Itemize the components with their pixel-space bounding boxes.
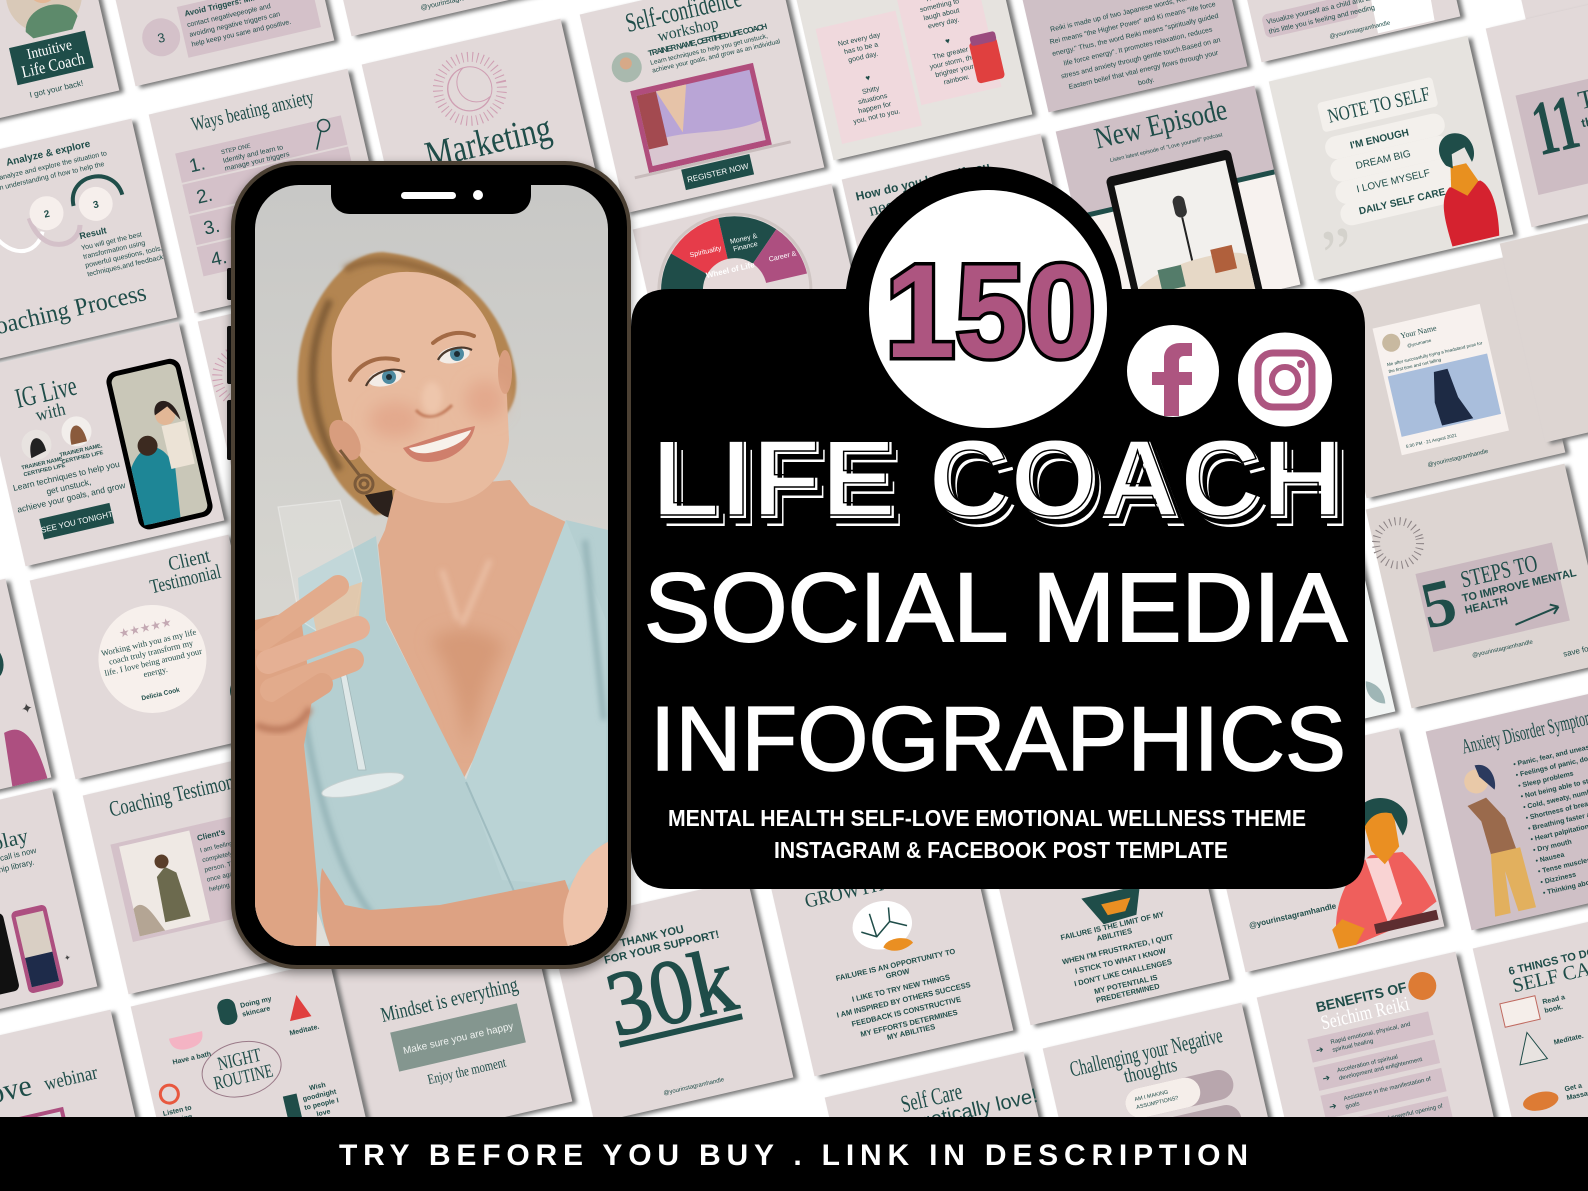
tile: affirmation note cards: happen for: [858, 101, 893, 115]
tile: five steps: @yourinstagramhandle: [1472, 639, 1534, 659]
tile: client testimonial: Client: [166, 545, 212, 576]
tile: benefits of seichim reiki: goals: [1345, 1101, 1360, 1110]
tile: client testimonial: Testimonial: [148, 561, 223, 598]
tile: self-confidence workshop: Learn techniques to help you get unstuck,: [650, 33, 769, 67]
tile: five steps: [1366, 463, 1588, 708]
badge: 150: [869, 190, 1107, 428]
tile: anxiety disorder symptoms: • Nausea: [1535, 852, 1565, 865]
heading: life coach: LIFE COACH: [653, 419, 1345, 542]
tile: note to self: I'M ENOUGH: [1349, 127, 1410, 152]
tile: benefits of seichim reiki: BENEFITS OF: [1314, 979, 1409, 1015]
tile: night routine: ROUTINE: [212, 1061, 275, 1094]
tile: affirmation note cards: good day.: [848, 51, 879, 64]
icon: instagram: [1238, 332, 1332, 426]
tile: ig live: IG Live: [12, 371, 80, 415]
tile: anxiety disorder symptoms: • Dizziness: [1540, 871, 1577, 886]
tile: affirmation note cards: brighter your: [935, 63, 975, 79]
tile: reiki description: life force energy". It promotes relaxation, reduces: [1063, 26, 1214, 68]
tile: benefits of seichim reiki: ➔: [1335, 1129, 1345, 1140]
tile: note to self: ”: [1315, 213, 1363, 295]
tile: wheel of life: Money &: [729, 233, 758, 246]
tile: your name post: the first time and not falling: [1388, 357, 1442, 374]
tile: avoid triggers: help keep you sane and positive.: [191, 19, 292, 49]
tile: growth mindset: GROW: [885, 966, 911, 981]
tile: reiki description: [1003, 0, 1247, 112]
tile: how do you know: [842, 134, 1086, 378]
tile: benefits of seichim reiki: spiritual healing: [1332, 1039, 1374, 1054]
tile: coaching process: transformation using: [83, 240, 146, 261]
tile: visualize yourself: [1216, 0, 1460, 62]
tile: right edge: [1500, 198, 1588, 442]
photo: smiling woman holding a champagne glass: [255, 185, 608, 946]
tile: benefits of seichim reiki: ➔: [1322, 1072, 1332, 1084]
tile: marketing: [362, 19, 606, 263]
tile: new episode: New Episode: [1091, 93, 1230, 156]
mouth: [403, 426, 475, 462]
tile: night routine: [131, 961, 372, 1189]
tile: handle strip: [306, 0, 550, 36]
tile: ways beating anxiety: 2.: [194, 185, 215, 209]
tile: benefits of seichim reiki: the heart for love: [1351, 1122, 1397, 1139]
tile: client testimonial: [30, 535, 274, 779]
tile: benefits of seichim reiki: ➔: [1315, 1044, 1325, 1055]
tile: coaching testimonials: Coaching Testimonials: [107, 763, 258, 822]
tile: your name post: Me after successfully trying a headstand pose for: [1386, 340, 1483, 367]
tile: affirmation note cards: The greater: [932, 46, 970, 61]
subtitle line 1: MENTAL HEALTH SELF-LOVE EMOTIONAL WELLNESS THEME: [668, 805, 1306, 831]
tile: ig live: with: [34, 399, 67, 425]
tile: benefits of seichim reiki: Acceleration of spiritual: [1337, 1054, 1398, 1074]
tile: affirmation note cards: rainbow.: [943, 74, 970, 86]
black title panel: [631, 167, 1365, 889]
tile: ways beating anxiety: manage your triggers: [224, 151, 291, 173]
tile: self care: unapologetically love!: [848, 1085, 1040, 1149]
tile: client testimonial: life. I love being around your: [103, 646, 203, 678]
tile: client testimonial: coach truly transform my: [108, 637, 195, 667]
tile: ig live: SEE YOU TONIGHT: [40, 509, 114, 535]
tile: ig live: TRAINER NAME,: [21, 456, 65, 472]
tile: visualize yourself: @yourinstagramhandle: [1329, 20, 1392, 40]
tile: your name post: @yourname: [1407, 338, 1432, 348]
tile: challenging negative thoughts: ASSUMPTIONS?: [1136, 1095, 1179, 1111]
tile: failure limiting mindset: WHEN I'M FRUSTRATED, I QUIT: [1061, 932, 1175, 966]
tile: ways beating anxiety: 1.: [187, 153, 207, 177]
right hand: [563, 842, 608, 946]
tile: growth mindset: I LIKE TO TRY NEW THINGS: [851, 972, 951, 1004]
tile: replay: ✦: [63, 953, 72, 963]
tile: ways beating anxiety: 4.: [209, 247, 229, 271]
tile: avoid triggers: contact negativepeople and: [186, 3, 272, 29]
tile: failure limiting mindset: ABILITIES: [1096, 926, 1133, 943]
tile: person writing: [1200, 728, 1444, 972]
tile: night routine: Listen to: [162, 1105, 192, 1118]
tile: six things to do: [1473, 903, 1588, 1147]
phone camera: [473, 190, 483, 200]
tile: top right corner: [1489, 0, 1588, 57]
tile: growth mindset: [769, 832, 1013, 1076]
tile: reiki description: Rei means "the Higher Power" and Ki means "life force: [1049, 1, 1217, 46]
tile: avoid triggers: avoiding negative triggers can: [189, 11, 281, 39]
eyes: [368, 370, 402, 387]
tile: coaching process: Result: [78, 225, 108, 241]
tile: ways beating anxiety: STEP ONE: [221, 144, 251, 156]
tile: your name post: @yourinstagramhandle: [1427, 449, 1490, 469]
tile: night routine: affirmations: [161, 1121, 202, 1137]
tile: replay: [0, 788, 97, 1032]
tile: self-confidence workshop: workshop: [656, 15, 720, 45]
tile: challenging negative thoughts: thoughts: [1122, 1054, 1179, 1088]
tile: eleven tips: [1486, 0, 1588, 227]
tile: five steps: 5: [1415, 565, 1463, 643]
tile: client testimonial: Working with you as my life: [100, 627, 197, 658]
tile: client testimonial: energy.: [142, 664, 168, 679]
tile: failure limiting mindset: I STICK TO WHAT I KNOW: [1074, 946, 1168, 976]
tile: self care: Self Care: [898, 1079, 965, 1118]
tile: ig live: Learn techniques to help you: [12, 459, 121, 493]
tile: coaching process: [0, 118, 178, 363]
icon: facebook: [1127, 325, 1219, 417]
tile: ways beating anxiety: [149, 69, 393, 313]
tile: failure limiting mindset: MY POTENTIAL IS: [1093, 973, 1158, 996]
tile: thank you 30k: FOR YOUR SUPPORT!: [603, 929, 720, 967]
panel background with circular tab: [631, 167, 1365, 889]
hair: [298, 252, 516, 515]
tile: ig live: [0, 322, 224, 566]
tile: benefits of seichim reiki: ➔: [1328, 1100, 1338, 1112]
tile: mindset is everything: Enjoy the moment: [426, 1056, 508, 1088]
tile: avoid triggers: 3: [156, 30, 167, 46]
badge: 150: 150: [885, 238, 1096, 386]
tile: affirmation note cards: has to be a: [844, 41, 879, 56]
dress: [298, 520, 608, 946]
tile: marketing: Marketing: [421, 107, 555, 177]
tile: coaching process: analyze and explore the situation to: [0, 150, 108, 182]
tile: coaching testimonials: I am feeling: [199, 840, 234, 854]
tile: moon behind phone: [198, 276, 442, 520]
tile: five steps: HEALTH: [1464, 595, 1509, 617]
tile: coaching process: Analyze & explore: [5, 139, 92, 169]
tile: night routine: calming: [166, 1114, 193, 1126]
tile: self-confidence workshop: REGISTER NOW: [686, 162, 750, 184]
heading: infographics: INFOGRAPHICS: [650, 689, 1346, 790]
tile: benefits of seichim reiki: [1257, 952, 1500, 1190]
tile: coaching testimonials: [83, 750, 327, 994]
neck and chest skin: [378, 480, 566, 778]
tile: self care: [825, 1051, 1049, 1191]
tile: night routine: love: [316, 1108, 331, 1118]
phone speaker: [401, 192, 456, 199]
tile: six things to do: Meditate.: [1553, 1033, 1584, 1047]
tile: replay: call is now: [0, 846, 37, 863]
tile: thank you 30k: @yourinstagramhandle: [663, 1077, 726, 1097]
champagne glass: [278, 500, 406, 803]
banner text: TRY BEFORE YOU BUY . LINK IN DESCRIPTION: [339, 1139, 1248, 1172]
tile: coaching process: You will get the best: [81, 231, 143, 252]
tile: self-confidence workshop: [580, 0, 824, 213]
tile: note to self: DAILY SELF CARE: [1358, 187, 1447, 217]
tile: thank you 30k: THANK YOU: [619, 923, 685, 950]
tile: coaching testimonials: helping me: [208, 879, 241, 893]
tile: reiki description: stress and anxiety through gentle touch.Based on an: [1060, 37, 1221, 80]
tile: benefits of seichim reiki: Seichim Reiki: [1319, 993, 1412, 1034]
tile: challenging negative thoughts: [1043, 1003, 1274, 1191]
tile: reiki description: energy." Thus, the word Reiki means "spiritually guided: [1052, 13, 1219, 58]
tile: wheel of life: Career &: [768, 250, 797, 264]
tile: how do you know: How do you know if you: [854, 159, 991, 204]
tile: ways beating anxiety: Identify and learn to: [222, 144, 284, 165]
tile: challenging negative thoughts: Challenging your Negative: [1067, 1022, 1225, 1082]
left arm and hand: [255, 586, 358, 946]
tile: coaching testimonials: completely: [202, 850, 234, 864]
tile: person writing: @yourinstagramhandle: [1248, 901, 1338, 930]
tile: client testimonial: Delicia Cook: [141, 687, 181, 702]
tile: intuitive life coach: I got your back!: [29, 79, 84, 100]
tile: growth mindset: GROWTH: [803, 873, 886, 913]
tile: intuitive life coach: Intuitive: [25, 37, 74, 63]
heading: life coach: LIFE COACH: [656, 423, 1348, 546]
tile: growth mindset: FEEDBACK IS CONSTRUCTIVE: [851, 995, 962, 1029]
tile: night routine: Wish: [309, 1082, 326, 1092]
tile: coaching process: powerful questions, tools,: [85, 245, 163, 270]
tile: six things to do: book.: [1544, 1004, 1564, 1015]
tile: ig live: CERTIFIED LIFE: [61, 450, 104, 465]
tile: mindset is everything: Make sure you are happy: [402, 1021, 515, 1057]
tile: hidden row d: [1106, 298, 1350, 542]
tile: night routine: goodnight: [302, 1088, 338, 1103]
phone notch: [331, 183, 531, 214]
tile: sparkle left edge: ✦: [19, 699, 35, 717]
tile: thank you 30k: 30k: [597, 928, 745, 1056]
tile: note to self: NOTE TO SELF: [1326, 83, 1432, 128]
tile: affirmation note cards: [788, 0, 1032, 160]
nose: [416, 405, 452, 416]
tile: benefits of seichim reiki: Assistance in the manifestation of: [1343, 1076, 1432, 1102]
tile: your name post: Your Name: [1400, 323, 1438, 340]
tile: avoid triggers: [90, 0, 334, 86]
face: [332, 272, 509, 503]
tile: challenging negative thoughts: AM I MAKING: [1134, 1090, 1169, 1103]
tile: affirmation note cards: you, not to you.: [853, 108, 901, 126]
tile: anxiety disorder symptoms: • Sleep problems: [1518, 770, 1574, 790]
tile: affirmation note cards: laugh about: [923, 7, 960, 22]
tile: night routine: skincare: [242, 1005, 271, 1019]
tile: growth mindset: I AM INSPIRED BY OTHERS SUCCESS: [836, 980, 971, 1020]
tile: night routine: NIGHT: [216, 1045, 264, 1075]
tile: self love webinar: [0, 1010, 141, 1190]
tile: new episode: [1056, 86, 1308, 362]
tile: coaching testimonials: once again: [206, 870, 239, 884]
tile: new episode: Listen latest episode of "Love yourself" podcast: [1109, 132, 1223, 164]
tile: coaching testimonials: person. This: [204, 859, 241, 874]
tile: failure limiting mindset: PREDETERMINED: [1095, 981, 1161, 1005]
tile: wheel of life: Finance: [733, 241, 759, 253]
tile: coaching process: techniques,and feedback: [87, 254, 165, 278]
tile: anxiety disorder symptoms: [1426, 686, 1588, 930]
tile: your name post: [1321, 254, 1565, 498]
tile: failure limiting mindset: FAILURE IS THE LIMIT OF MY: [1060, 910, 1165, 942]
tile: your name post: 5:30 PM · 21 August 2021: [1405, 432, 1458, 449]
tile: intuitive life coach: Life Coach: [20, 49, 87, 82]
tile: six things to do: Read a: [1542, 994, 1566, 1006]
tile: right sliver bubble: [1151, 513, 1395, 757]
tile: night routine: to people I: [304, 1097, 340, 1112]
tile: note to self: I LOVE MYSELF: [1356, 168, 1431, 195]
tile: affirmation note cards: ♥: [944, 36, 951, 46]
tile: growth mindset: FAILURE IS AN OPPORTUNITY TO: [835, 947, 956, 983]
tile: anxiety disorder symptoms: • Dry mouth: [1532, 839, 1572, 854]
tile: note to self: [1269, 36, 1517, 298]
tile: affirmation note cards: Shitty: [862, 85, 881, 96]
tile: self-confidence workshop: achieve your goals, and grow as an individual: [651, 38, 781, 75]
tile: five steps: STEPS TO: [1458, 551, 1540, 594]
tile: night routine: Doing my: [240, 996, 272, 1010]
tile: growth mindset: MY ABILITIES: [886, 1022, 936, 1042]
tile: ig live: TRAINER NAME,: [59, 443, 103, 459]
tile: affirmation note cards: situations: [858, 93, 889, 106]
tile: affirmation note cards: every day.: [927, 17, 960, 31]
tile: wheel of life: [633, 184, 877, 428]
tile: growth mindset: MY EFFORTS DETERMINES: [860, 1008, 958, 1039]
tile: ig live: get unstuck,: [45, 477, 92, 497]
tile: thank you 30k: [549, 879, 793, 1123]
tile: benefits of seichim reiki: development and enlightenment: [1338, 1057, 1423, 1082]
tile: how do you know: need this: [867, 186, 934, 220]
tile: note to self: DREAM BIG: [1355, 149, 1412, 172]
tile: ways beating anxiety: Ways beating anxiety: [189, 86, 316, 136]
tile: affirmation note cards: your storm, the: [929, 54, 976, 71]
tile: visualize yourself: this little you is feeling and needing: [1268, 5, 1376, 36]
tile: affirmation note cards: ♥: [865, 73, 871, 83]
tile: intuitive life coach: [0, 0, 119, 136]
tile: failure limiting mindset: I DON'T LIKE CHALLENGES: [1073, 957, 1173, 988]
tile: six things to do: Get a: [1564, 1083, 1583, 1093]
tile: benefits of seichim reiki: Rapid emotional, physical, and: [1330, 1022, 1411, 1046]
earring: [340, 450, 373, 493]
tile: five steps: TO IMPROVE MENTAL: [1461, 567, 1578, 605]
tile: night routine: Meditate.: [289, 1024, 320, 1037]
tile: ig live: achieve your goals, and grow: [16, 480, 127, 515]
tile: reiki description: body.: [1137, 77, 1155, 87]
phone mockup: [227, 163, 629, 967]
tile: mindset is everything: [328, 903, 572, 1147]
heading: social media: SOCIAL MEDIA: [644, 553, 1347, 662]
tile: wheel of life: Wheel of Life: [705, 260, 756, 280]
tile: ways beating anxiety: 3.: [202, 216, 222, 240]
tile: coaching process: 2: [43, 209, 51, 221]
tile: wheel of life: Spirituality: [689, 245, 723, 259]
bottom banner: [0, 1117, 1588, 1191]
forearm across body: [320, 868, 590, 946]
phone side buttons: [227, 268, 234, 460]
tile: self love webinar: webinar: [42, 1061, 100, 1095]
tile: night routine: Have a bath: [172, 1051, 212, 1066]
tile: mindset is everything: Mindset is everything: [378, 972, 521, 1027]
tile: coaching process: 3: [92, 199, 100, 211]
heading: life coach: LIFE COACH: [659, 427, 1351, 550]
subtitle line 2: INSTAGRAM & FACEBOOK POST TEMPLATE: [774, 837, 1228, 863]
tile: self-confidence workshop: TRAINER NAME, CERTIFIED LIFE COACH: [647, 22, 768, 58]
tile: sparkle left edge: [0, 579, 51, 823]
tile: client testimonial: ★★★★★: [117, 615, 173, 641]
phone body: [233, 163, 629, 967]
tile: affirmation note cards: Not every day: [837, 32, 881, 48]
tile: coaching testimonials: Client's: [196, 827, 227, 843]
tile: benefits of seichim reiki: A profound and powerful opening of: [1350, 1104, 1444, 1131]
heading: life coach: LIFE COACH: [650, 416, 1342, 539]
tile: failure limiting mindset: [985, 781, 1229, 1025]
eyebrows: [350, 333, 474, 380]
tile: reiki description: Eastern belief that vital energy flows through your: [1068, 50, 1220, 91]
tile: ig live: CERTIFIED LIFE: [23, 463, 66, 478]
